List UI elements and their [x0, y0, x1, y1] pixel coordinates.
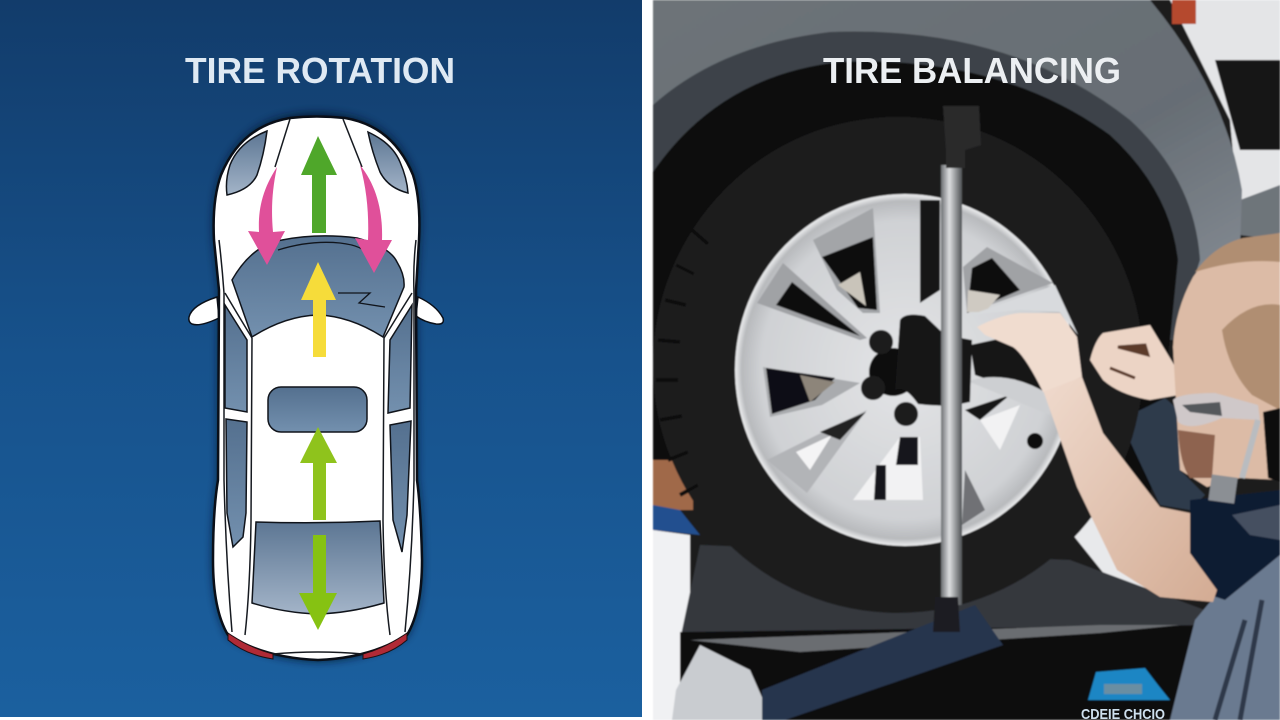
- rim disc: [735, 194, 1075, 546]
- wheel well: [653, 61, 1178, 500]
- mechanic lower face shadow: [1178, 430, 1215, 478]
- panel background: blue gradient: [0, 0, 642, 717]
- black mounting clamp: [895, 315, 972, 406]
- rim window top left dark core: [822, 237, 877, 310]
- tire tread: [656, 230, 708, 495]
- lift lower section: [680, 625, 1210, 720]
- lift platform: [680, 545, 1210, 640]
- tire: [653, 117, 1143, 613]
- garage background upper right: [1170, 0, 1280, 240]
- arrow: right pink curved: [355, 165, 392, 273]
- rim window right: [970, 330, 1045, 400]
- photo background: [653, 0, 1280, 720]
- mechanic right hand: [977, 313, 1082, 392]
- arrow: lime down: [299, 535, 337, 630]
- car body lines: [219, 119, 416, 654]
- white cloth at bottom left: [672, 645, 772, 720]
- rim window upper left: [757, 263, 867, 340]
- dark trousers behind the arm: [1120, 398, 1205, 510]
- arrow: left pink curved: [248, 167, 285, 265]
- arrow: yellow up: [301, 262, 336, 357]
- heading: tire balancing: TIRE BALANCING: [823, 50, 1121, 91]
- windshield: [232, 236, 404, 337]
- vertical balancing bar: [941, 165, 962, 605]
- car top view diagram: [189, 112, 443, 662]
- car body: [213, 116, 422, 660]
- mechanic head: [1173, 233, 1280, 487]
- balancing bar top knob: [943, 106, 981, 168]
- rim window top left: [813, 208, 880, 313]
- left front side window: [225, 305, 247, 412]
- rim window top center: [920, 200, 940, 303]
- rim window right lower: [980, 405, 1020, 450]
- vehicle fender: [653, 0, 1242, 330]
- center hub: [869, 348, 917, 396]
- left rear side window: [226, 419, 247, 547]
- lug nuts: [869, 330, 893, 354]
- rim window bottom: [853, 437, 923, 500]
- mechanic vest: [1170, 545, 1280, 720]
- right spoke: [970, 377, 1050, 415]
- blue equipment box: [1088, 668, 1170, 700]
- lower background left: [653, 460, 693, 510]
- arrow: front green up: [301, 136, 337, 233]
- workshop floor light patch: [1065, 505, 1170, 600]
- mechanic navy shirt: [1190, 490, 1280, 600]
- rear window: [252, 521, 384, 614]
- right tail light: [363, 633, 407, 659]
- glasses strap clip: [1208, 474, 1238, 504]
- panel: tire rotation: [0, 0, 642, 717]
- icon: left side mirror: [189, 297, 219, 325]
- mechanic arm: [1043, 377, 1217, 602]
- rim window lower left: [763, 367, 860, 417]
- fender arch trim: [653, 32, 1200, 340]
- sunroof: [268, 387, 367, 432]
- rim window bottom right: [962, 470, 985, 525]
- heading: tire rotation: TIRE ROTATION: [185, 50, 455, 91]
- right front side window: [388, 305, 412, 413]
- safety glasses: [1173, 393, 1260, 426]
- left tail light: [228, 633, 273, 659]
- rim window bottom left: [767, 410, 867, 493]
- blue lever handle: [762, 605, 1003, 720]
- mechanic left hand: [1090, 325, 1190, 400]
- alloy wheel rim: [735, 194, 1075, 546]
- clear glove shine: [970, 285, 1078, 335]
- windshield crack marks: [278, 242, 385, 307]
- right rear side window: [390, 421, 411, 552]
- car shadow: [212, 112, 423, 662]
- icon: right side mirror: [416, 297, 443, 324]
- black collar: [1263, 408, 1280, 482]
- balancing bar bottom knob: [933, 597, 960, 632]
- panel: tire balancing photo illustration: [653, 0, 1280, 720]
- arrow: lime up: [300, 427, 337, 520]
- mechanic hair: [1195, 233, 1280, 410]
- icon: right headlight: [368, 132, 408, 193]
- rim window top right: [963, 247, 1053, 313]
- icon: left headlight: [226, 131, 267, 195]
